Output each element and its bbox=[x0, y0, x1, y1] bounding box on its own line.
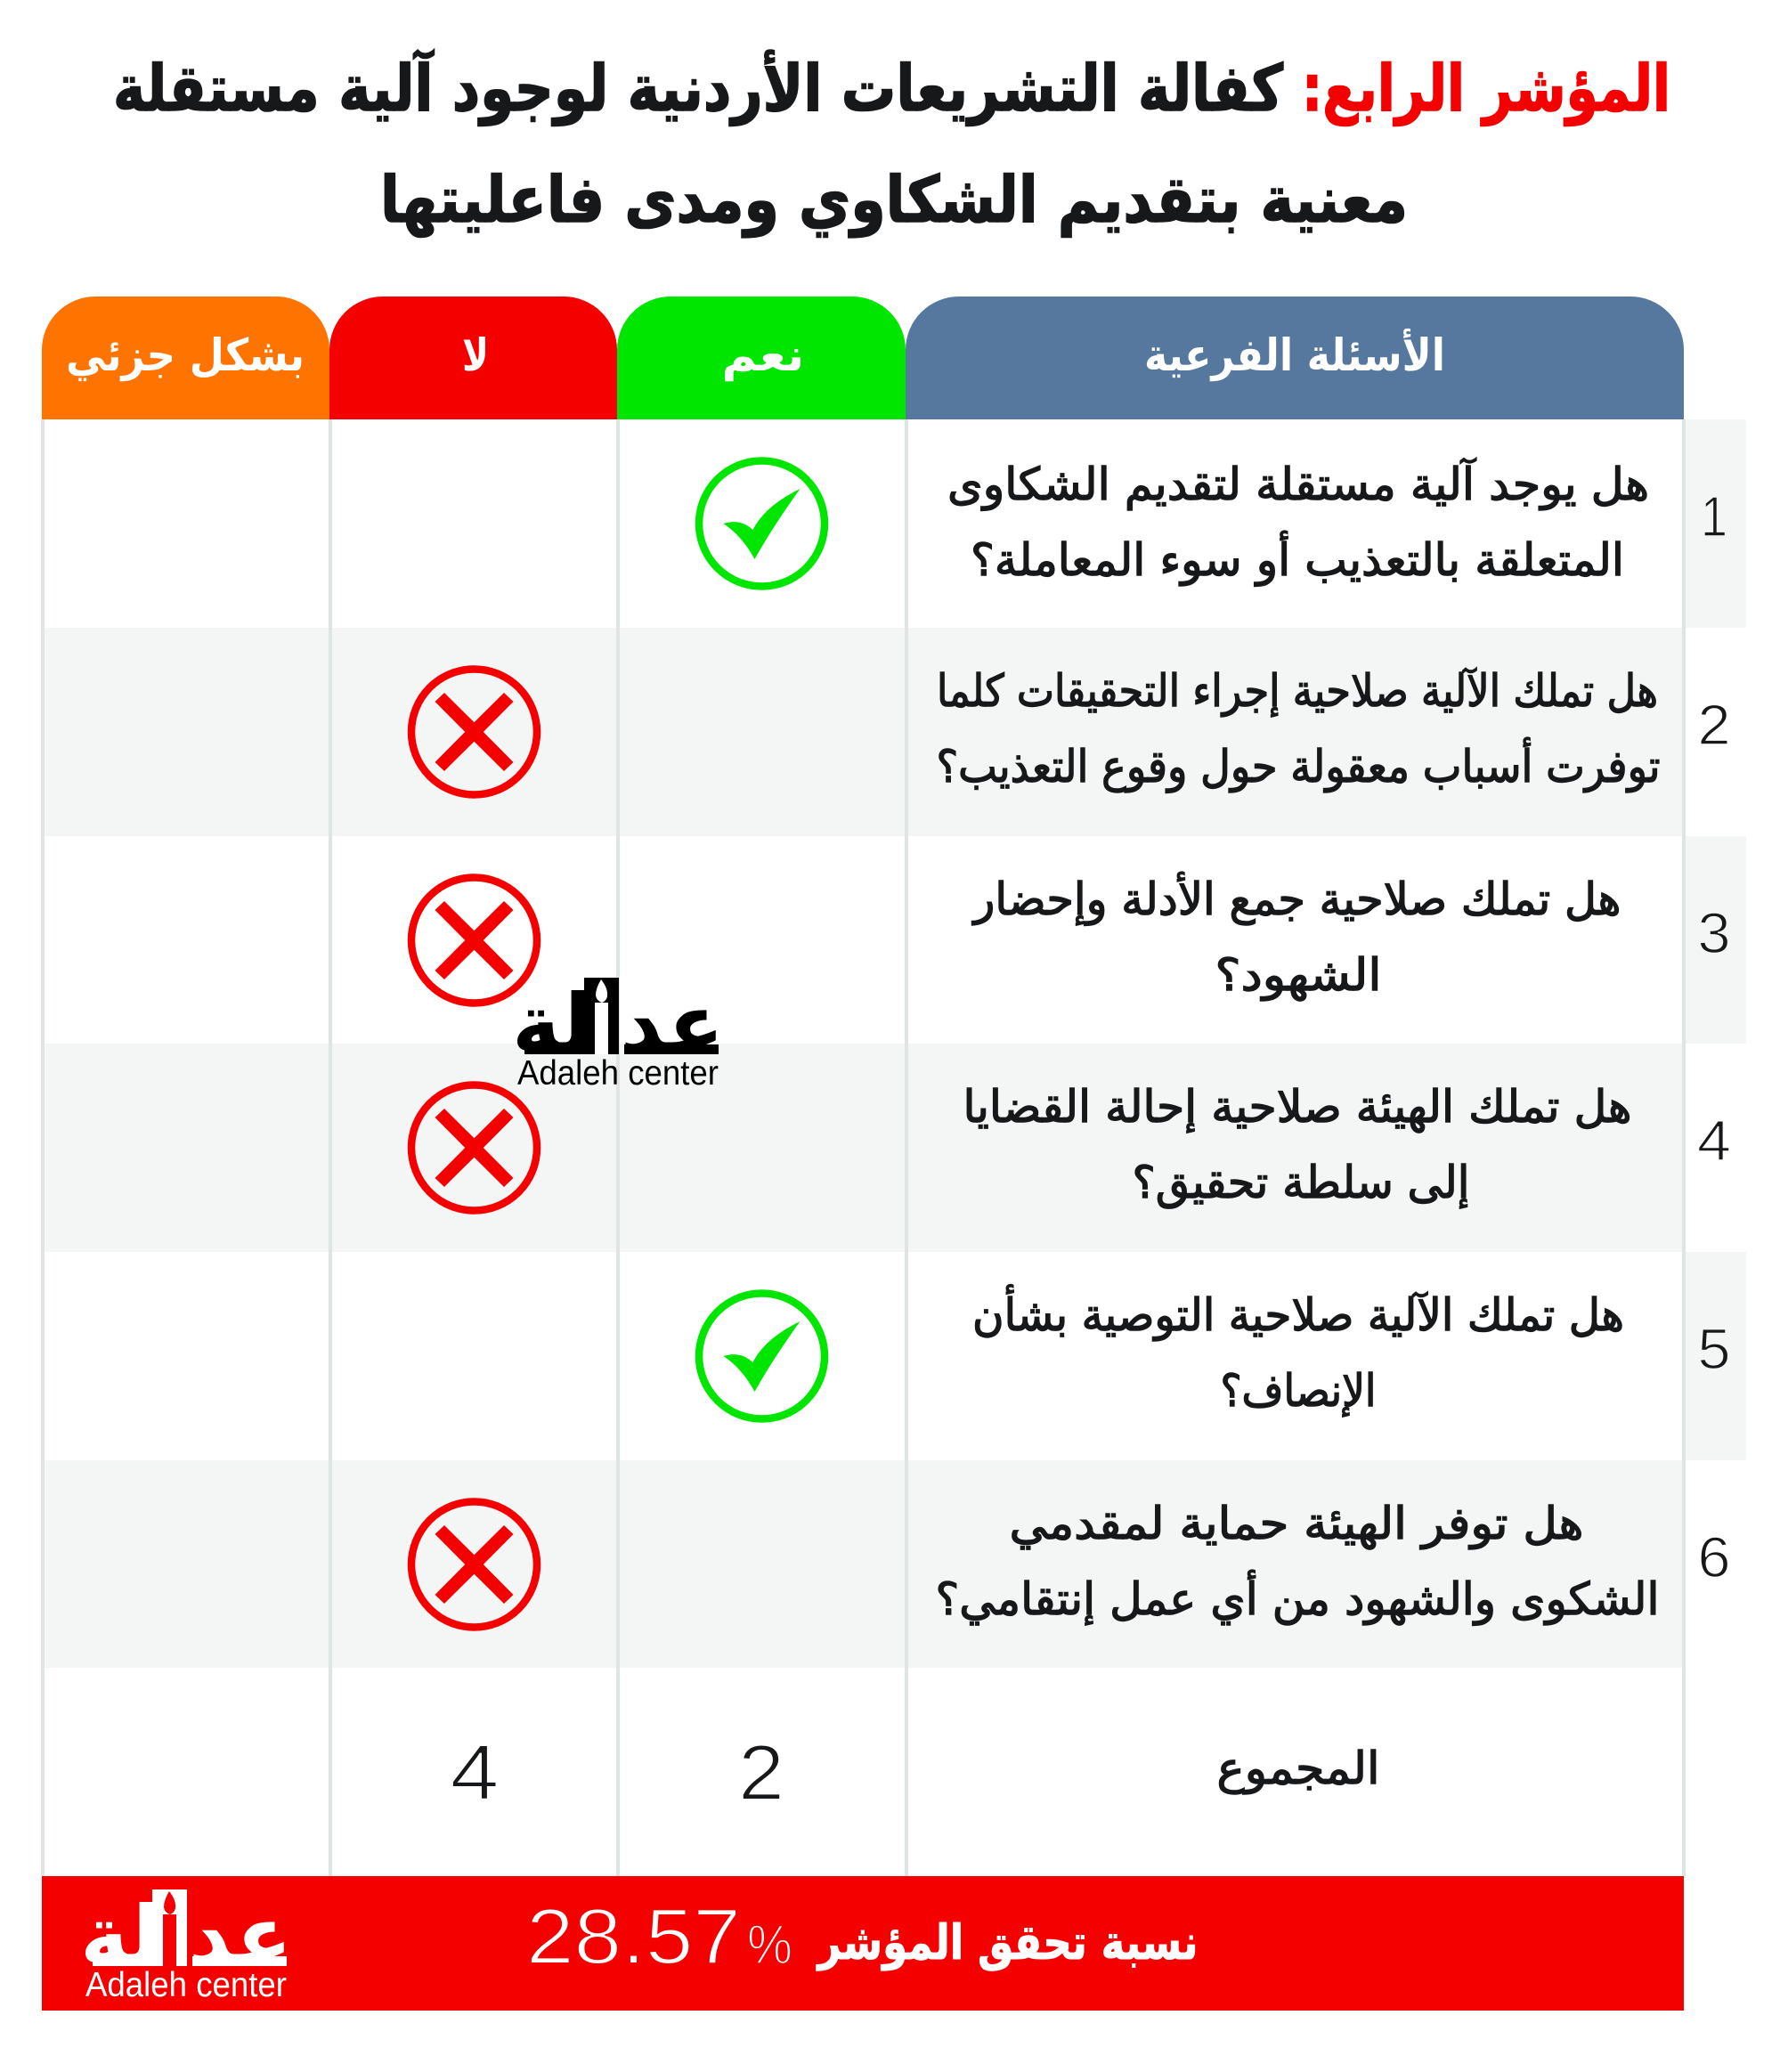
title: معنية بتقديم الشكاوي ومدى فاعليتها bbox=[380, 162, 1408, 238]
row 2 question bbox=[937, 665, 1660, 793]
header: no column bbox=[329, 297, 617, 419]
row 3 number: 3 bbox=[1697, 901, 1731, 965]
title: كفالة التشريعات الأردنية لوجود آلية مستقلة bbox=[113, 49, 1283, 126]
row 1 question bbox=[947, 458, 1649, 587]
row 6 number: 6 bbox=[1697, 1525, 1731, 1589]
icon: cross row 6 bbox=[411, 1501, 537, 1628]
footer percent sign: % bbox=[747, 1914, 792, 1976]
row 6 question bbox=[935, 1498, 1660, 1626]
footer logo: Adaleh center bbox=[85, 1966, 287, 2004]
row 6 question: الشكوى والشهود من أي عمل إنتقامي؟ bbox=[935, 1570, 1660, 1626]
icon: cross row 4 bbox=[411, 1085, 537, 1211]
table row backgrounds bbox=[42, 419, 1746, 1668]
row 6 question: هل توفر الهيئة حماية لمقدمي bbox=[1010, 1498, 1583, 1550]
title bbox=[113, 49, 1670, 238]
icon: check row 5 bbox=[699, 1293, 825, 1419]
row 1 question: المتعلقة بالتعذيب أو سوء المعاملة؟ bbox=[971, 531, 1624, 587]
totals label: المجموع bbox=[1216, 1743, 1380, 1794]
row 2 number: 2 bbox=[1697, 693, 1731, 757]
row 5 question: هل تملك الآلية صلاحية التوصية بشأن bbox=[972, 1284, 1624, 1341]
header: sub-questions column: الأسئلة الفرعية bbox=[1144, 328, 1445, 382]
header: partial column bbox=[42, 297, 329, 419]
header: yes column bbox=[617, 297, 906, 419]
header: partial column: بشكل جزئي bbox=[66, 329, 305, 382]
row 4 question: إلى سلطة تحقيق؟ bbox=[1133, 1157, 1469, 1209]
header: yes column: نعم bbox=[721, 329, 805, 381]
row 4 number: 4 bbox=[1697, 1109, 1731, 1173]
row 4 question: هل تملك الهيئة صلاحية إحالة القضايا bbox=[963, 1081, 1631, 1134]
grid lines bbox=[41, 419, 1686, 1876]
total yes: 2 bbox=[738, 1728, 784, 1816]
icon: check row 1 bbox=[699, 461, 825, 586]
title: المؤشر الرابع: bbox=[1302, 51, 1670, 126]
icon: cross row 2 bbox=[411, 670, 537, 794]
center watermark logo: عدالة bbox=[512, 977, 724, 1072]
icon: cross row 3 bbox=[411, 878, 537, 1003]
row 3 question bbox=[971, 872, 1621, 1002]
row 3 question: الشهود؟ bbox=[1215, 949, 1382, 1002]
row 1 question: هل يوجد آلية مستقلة لتقديم الشكاوى bbox=[947, 458, 1649, 511]
row 4 question bbox=[963, 1081, 1631, 1209]
total no: 4 bbox=[451, 1728, 499, 1816]
center watermark logo: Adaleh center bbox=[517, 1054, 719, 1093]
header: sub-questions column bbox=[906, 297, 1684, 419]
footer label: نسبة تحقق المؤشر bbox=[816, 1914, 1199, 1970]
row 5 number: 5 bbox=[1697, 1317, 1731, 1381]
footer logo: عدالة bbox=[80, 1889, 292, 1984]
row 1 number: 1 bbox=[1701, 484, 1727, 548]
row 2 question: توفرت أسباب معقولة حول وقوع التعذيب؟ bbox=[937, 737, 1660, 793]
header: no column: لا bbox=[462, 329, 489, 381]
footer percentage: 28.57 bbox=[526, 1892, 741, 1980]
row 5 question: الإنصاف؟ bbox=[1220, 1365, 1377, 1417]
row 2 question: هل تملك الآلية صلاحية إجراء التحقيقات كلما bbox=[937, 665, 1658, 718]
row 5 question bbox=[972, 1284, 1624, 1417]
footer bar bbox=[42, 1876, 1684, 2011]
row 3 question: هل تملك صلاحية جمع الأدلة وإحضار bbox=[971, 872, 1621, 926]
